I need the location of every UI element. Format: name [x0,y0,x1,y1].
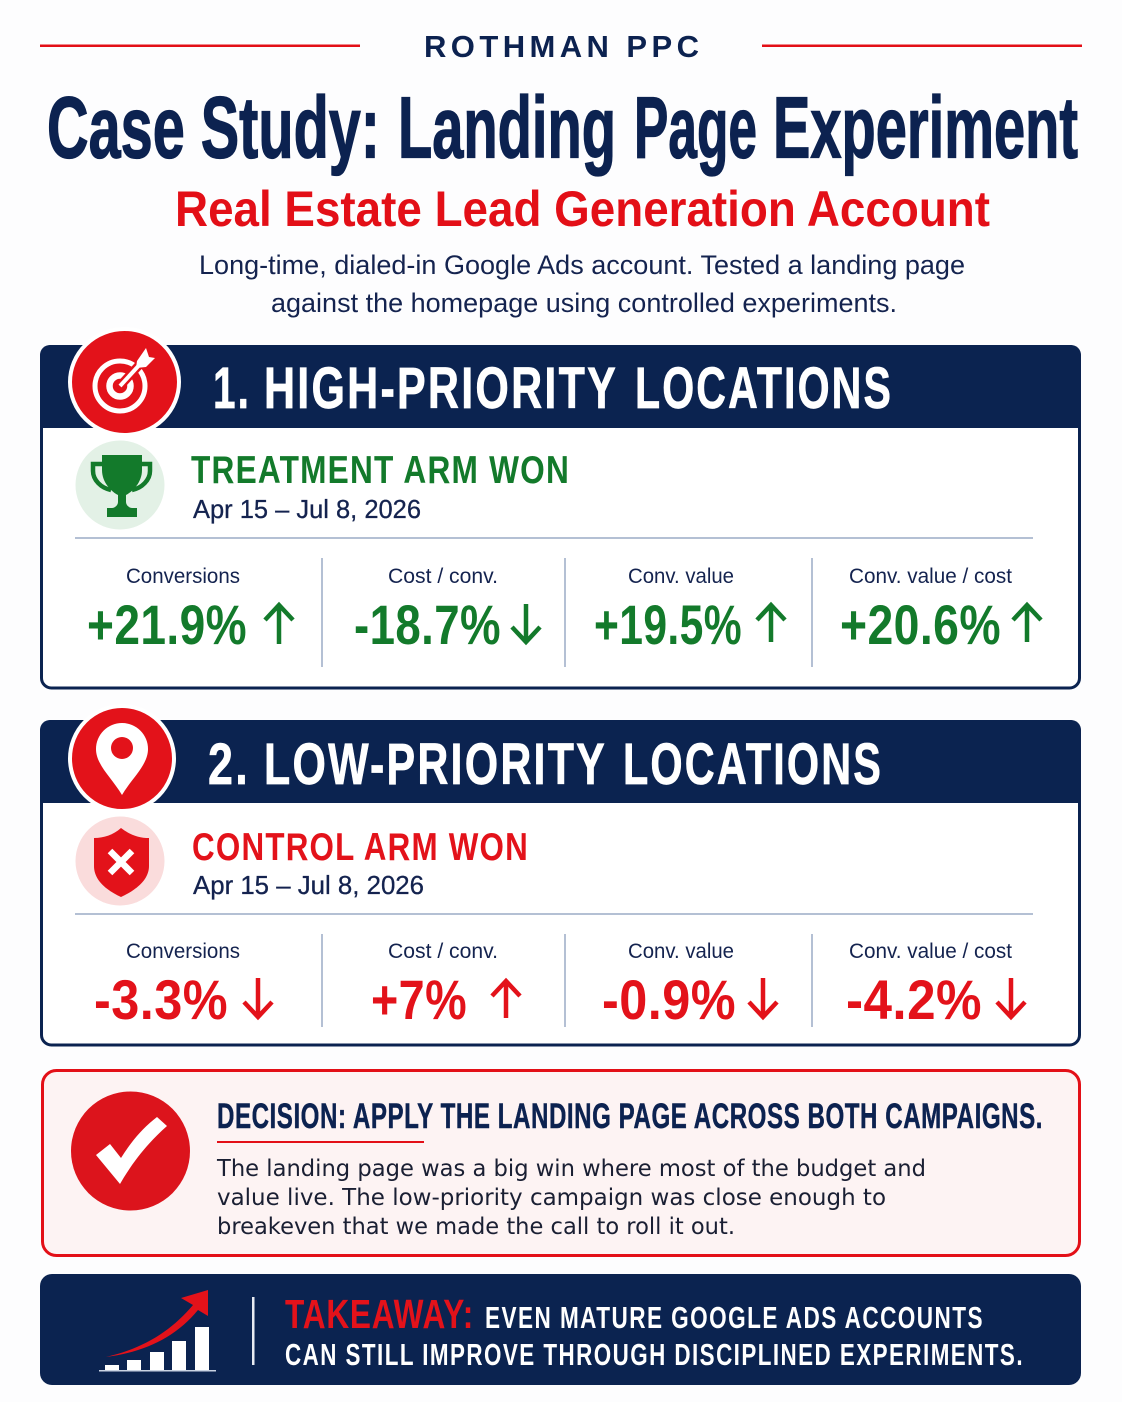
decision body text [216,1156,926,1240]
brand header: ROTHMAN PPC [424,29,699,64]
metric: conversions: +21.9% [87,593,247,656]
status: control arm won: CONTROL ARM WON [192,826,529,869]
takeaway text [285,1291,1024,1372]
title: Page [634,80,757,176]
heading: low-priority locations: 2. [208,732,250,797]
metric: conversion value: +19.5% [594,593,742,656]
metric: conversion value: -0.9% [602,968,736,1031]
metric: conversion value per cost [846,940,1025,1031]
metric: conversion value per cost: -4.2% [846,968,982,1031]
panel: decision [42,1070,1080,1256]
metric: conversions: Conversions [126,565,240,588]
metric: conversions [94,940,272,1031]
metric: cost per conversion [371,940,520,1031]
metric: conversions [87,565,293,656]
title: Landing [398,80,616,176]
decision body text: breakeven that we made the call to roll it out. [217,1214,735,1240]
metric: conversion value per cost: Conv. value / cost [849,565,1012,588]
icon: rising bar chart [99,1290,216,1372]
icon: location pin [70,706,174,811]
icon: check mark [71,1092,190,1210]
takeaway text: TAKEAWAY: [285,1291,474,1337]
panel: takeaway [40,1274,1081,1385]
icon: target with arrow [70,329,179,435]
panel header: high-priority [40,345,1081,428]
panel header: low-priority [40,720,1081,803]
icon: shield with cross badge [76,816,164,906]
intro text [199,250,965,318]
metric: conversion value per cost: +20.6% [840,593,1001,656]
decision body text: value live. The low-priority campaign was close enough to [217,1185,886,1211]
date range: Apr 15 – Jul 8, 2026 [193,494,421,524]
panel: low-priority locations [40,706,1081,1045]
intro text: against the homepage using controlled experiments. [271,288,897,318]
title [47,80,1078,176]
metric: conversion value [602,940,777,1031]
metric: conversion value: Conv. value [628,565,734,588]
date range: Apr 15 – Jul 8, 2026 [193,870,424,900]
metric: conversion value per cost [840,565,1041,656]
heading: low-priority locations [208,732,883,797]
panel: high-priority locations [40,329,1081,688]
metric: conversion value [594,565,785,656]
metric: cost per conversion [354,565,540,656]
intro text: Long-time, dialed-in Google Ads account. Tested a landing page [199,250,965,280]
metric: conversion value: Conv. value [628,940,734,963]
metric: cost per conversion: -18.7% [354,593,501,656]
decision body text: The landing page was a big win where most of the budget and [216,1156,926,1182]
heading: high-priority locations: LOCATIONS [635,356,893,421]
heading: low-priority locations: LOCATIONS [623,732,883,797]
heading: high-priority locations: 1. [213,356,251,421]
metric: cost per conversion: Cost / conv. [388,565,498,588]
metric: conversions: Conversions [126,940,240,963]
title: Case Study: [47,80,380,176]
metric: cost per conversion: +7% [371,968,467,1031]
metric: conversions: -3.3% [94,968,228,1031]
subtitle: Real Estate Lead Generation Account [175,181,990,237]
metric: cost per conversion: Cost / conv. [388,940,498,963]
metric: conversion value per cost: Conv. value / cost [849,940,1012,963]
heading: high-priority locations: HIGH-PRIORITY [264,356,618,421]
heading: low-priority locations: LOW-PRIORITY [264,732,607,797]
icon: trophy badge [76,440,164,530]
status: treatment arm won: TREATMENT ARM WON [191,449,570,492]
